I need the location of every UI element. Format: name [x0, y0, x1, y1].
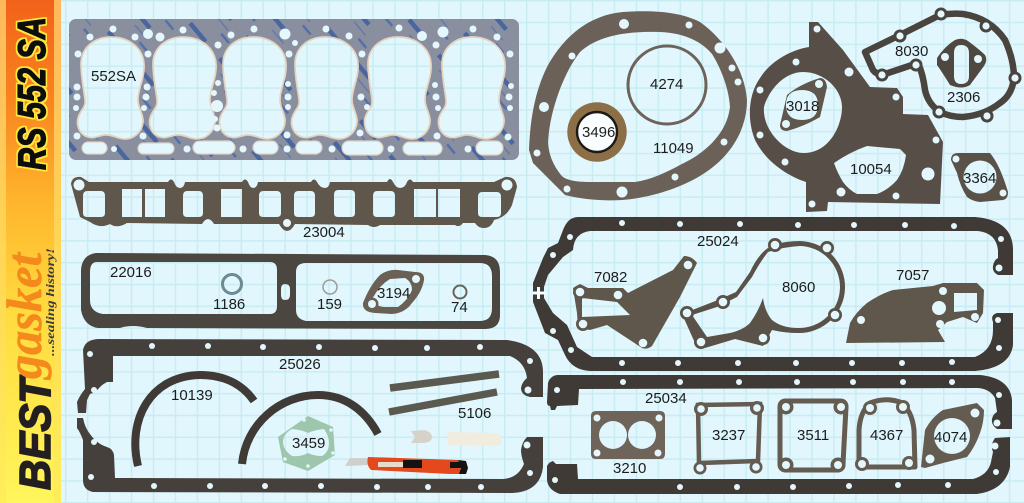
- logo: BEST gasket: BEST: [11, 375, 60, 490]
- gasket: 3511: [778, 400, 848, 472]
- gasket: 22016 valve cover: [81, 253, 500, 329]
- gasket: 552SA cylinder head: 552SA: [91, 68, 136, 85]
- gasket: 25024 oil pan right set: [533, 217, 1013, 371]
- gasket: 2306 fuel pump: 2306: [947, 89, 980, 106]
- gasket: 7082: [573, 256, 697, 349]
- gasket: 10054 front plate: 10054: [850, 161, 892, 178]
- gasket: 8060 water pump: 8060: [782, 279, 815, 296]
- seal ring: 1186: 1186: [213, 296, 245, 313]
- oil seal: 3496: [567, 102, 627, 162]
- seal ring: 74: 74: [451, 299, 468, 316]
- gasket: 8030 water pump: [865, 8, 1022, 122]
- oil seal: 3496: 3496: [582, 124, 615, 141]
- gasket: 25034 oil pan lower set: [547, 375, 1012, 494]
- seal ring: 4274: [628, 46, 706, 124]
- gasket: 3364: [951, 153, 1008, 202]
- seals: 5106 rope tubes: [389, 374, 499, 422]
- gasket: 3194: 3194: [377, 285, 410, 302]
- gasket: 25026 oil pan left set: [77, 339, 543, 493]
- seals: 5106 rope tubes: 5106: [458, 405, 491, 422]
- gasket: 11049 timing cover: [529, 11, 747, 200]
- gasket: 3194: [363, 270, 424, 314]
- gasket: 3237: 3237: [712, 427, 745, 444]
- gasket: arc seal right: [242, 395, 378, 464]
- seal ring: 1186: [213, 274, 245, 313]
- gasket: 3018: 3018: [786, 98, 819, 115]
- gasket: 3210 carburetor: [591, 411, 665, 477]
- gasket: 4074: 4074: [934, 429, 967, 446]
- gasket: 25024 oil pan right set: 25024: [697, 233, 739, 250]
- gasket: 7082: 7082: [594, 269, 627, 286]
- seal ring: 74: [451, 286, 468, 316]
- gasket: 8060 water pump: [680, 238, 845, 349]
- gasket: 23004 intake/exhaust manifold: [71, 177, 517, 241]
- seal ring: 4274: 4274: [650, 76, 683, 93]
- gasket: 23004 intake/exhaust manifold: 23004: [303, 224, 345, 241]
- gasket: 7057: [846, 267, 984, 343]
- gasket: 10139 arc seal: 10139: [171, 387, 213, 404]
- gasket: 3364: 3364: [963, 170, 996, 187]
- part: cream strip: [447, 432, 502, 446]
- logo: BEST gasket: [0, 248, 60, 490]
- gasket: 22016 valve cover: 22016: [110, 264, 152, 281]
- gasket: 4367: 4367: [870, 427, 903, 444]
- seal ring: 159: 159: [317, 296, 342, 313]
- gasket: 8030 water pump: 8030: [895, 43, 928, 60]
- gasket: 25026 oil pan left set: 25026: [279, 356, 321, 373]
- logo: BEST gasket: ...sealing history!: [43, 248, 57, 356]
- gasket: 4367: [855, 400, 916, 471]
- gasket: 10054 front plate: [750, 22, 943, 212]
- gasket: 3237: [694, 401, 764, 474]
- gasket: 11049 timing cover: 11049: [653, 140, 694, 157]
- gasket: 7057: 7057: [896, 267, 929, 284]
- gasket: 3018: [780, 78, 827, 131]
- seal ring: 159: [317, 280, 342, 313]
- gasket: 3511: 3511: [797, 427, 829, 444]
- gasket: 2306 fuel pump: [937, 39, 986, 106]
- left brand sidebar: [0, 0, 61, 503]
- gasket: 25034 oil pan lower set: 25034: [645, 390, 687, 407]
- gasket: 552SA cylinder head: [69, 19, 519, 160]
- part: white tab: [411, 430, 432, 443]
- gasket: 3459 green plate: [278, 416, 335, 471]
- gasket: 3459 green plate: 3459: [292, 435, 325, 452]
- icon: utility knife: [345, 457, 468, 474]
- gasket: 10139 arc seal: [135, 375, 254, 466]
- gasket: 4074: [921, 403, 984, 468]
- gasket: 3210 carburetor: 3210: [613, 460, 646, 477]
